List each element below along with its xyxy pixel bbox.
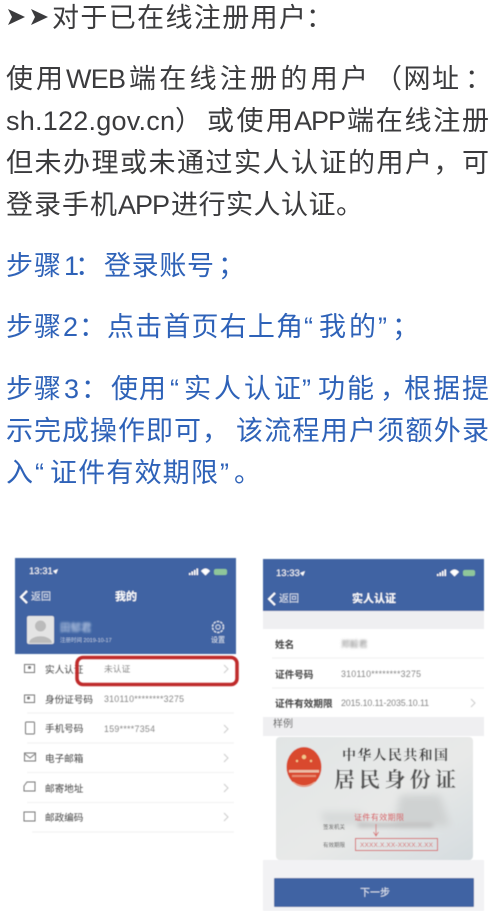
step 3: 3 <box>64 374 79 404</box>
step 3: 根据提 <box>404 374 489 404</box>
blue header: verification: 13:33 <box>276 568 300 579</box>
step 2 <box>6 312 419 342</box>
icon: settings gear <box>212 622 224 632</box>
step 3 <box>6 374 489 488</box>
intro paragraph: ） <box>175 106 202 136</box>
icon: avatar <box>27 616 54 644</box>
icon: status bar <box>437 570 475 576</box>
intro paragraph: 或使用 <box>207 106 293 136</box>
ID card sample: 证件有效期限 <box>354 812 404 822</box>
blue header: my profile: 返回 <box>31 591 51 603</box>
intro paragraph: 端在线注册 <box>347 106 489 136</box>
row: ID number <box>24 694 184 706</box>
row: real-name verification <box>24 663 228 676</box>
step 3: 功能 <box>318 374 374 404</box>
heading: registered online users: 对于已在线注册用户 <box>52 3 306 33</box>
step 3: 示完成操作即可 <box>6 416 201 446</box>
row: real-name verification: 未认证 <box>104 663 131 674</box>
step 1: 1 <box>64 251 79 281</box>
step 3: 入 <box>6 458 33 488</box>
intro paragraph: 登录手机 <box>6 190 117 220</box>
callout: red highlight box <box>77 658 237 684</box>
row: phone number: 159****7354 <box>104 724 155 734</box>
form rows: 2015.10.11-2035.10.11 <box>341 698 429 708</box>
row: email <box>24 753 228 765</box>
arrow <box>374 824 378 836</box>
ID card sample: 签发机关 <box>323 823 346 831</box>
step 3: ： <box>81 374 108 404</box>
intro paragraph: sh.122.gov.cn <box>6 106 175 136</box>
step 3: ” <box>220 458 229 488</box>
blue header: my profile: 我的 <box>115 589 137 603</box>
sample label band: 样例 <box>273 717 293 730</box>
step 1: ； <box>218 251 245 281</box>
intro paragraph: 端在线注册的用户 <box>129 64 368 94</box>
step 3: 该流程用户须额外录 <box>236 416 489 446</box>
step 3: 使用 <box>111 374 166 404</box>
step 3: 。 <box>234 458 261 488</box>
step 1: 登录账号 <box>104 251 214 281</box>
bottom band with next button <box>263 860 484 911</box>
step 1 <box>6 251 245 281</box>
form rows: 姓名 <box>275 639 294 651</box>
step 2: “ <box>304 312 313 342</box>
form rows: 证件号码 <box>275 669 314 681</box>
intro paragraph: 进行实人认证。 <box>171 190 363 220</box>
intro paragraph: 但未办理或未通过实人认证的用户，可 <box>6 148 489 178</box>
row: real-name verification: 实人认证 <box>45 664 84 676</box>
row: phone number: 手机号码 <box>45 723 84 735</box>
step 3: 实人认证 <box>184 374 301 404</box>
sample label band <box>263 717 484 736</box>
blue header: my profile: 设置 <box>211 635 225 644</box>
blue header: my profile: 田郁君 <box>60 621 92 634</box>
row: mailing address: 邮寄地址 <box>45 783 84 795</box>
row: email: 电子邮箱 <box>45 753 84 765</box>
blue header: verification: 实人认证 <box>352 591 396 605</box>
step 3: 证件有效期限 <box>50 458 218 488</box>
form rows: 郑毅君 <box>341 638 368 649</box>
blue header: my profile <box>15 558 236 654</box>
step 3: “ <box>35 458 44 488</box>
icon: double arrow <box>8 9 48 25</box>
form rows <box>272 638 484 710</box>
step 1: 步骤 <box>6 251 61 281</box>
right phone screenshot <box>263 559 484 911</box>
step 3: ， <box>202 416 229 446</box>
step 2: ； <box>392 312 419 342</box>
blurred issuing authority <box>358 823 433 827</box>
gray separator band <box>263 611 484 629</box>
blue header: my profile: 13:31 <box>29 566 53 577</box>
blue header: my profile: 注册时间 2019-10-17 <box>60 636 112 644</box>
intro paragraph: WEB <box>66 64 126 94</box>
profile rows <box>24 663 234 832</box>
step 2: 我的 <box>319 312 376 342</box>
intro paragraph: APP <box>118 190 170 220</box>
row: postal code: 邮政编码 <box>45 812 84 824</box>
bottom band with next button: 下一步 <box>360 887 390 899</box>
icon: back chevron <box>269 593 275 605</box>
icon: national emblem <box>286 747 322 787</box>
row: ID number: 身份证号码 <box>45 694 93 706</box>
step 2: 2 <box>63 312 78 342</box>
step 3: “ <box>170 374 179 404</box>
step 3: 步骤 <box>6 374 61 404</box>
blue header: verification: 返回 <box>279 593 299 605</box>
form rows: 310110********3275 <box>341 669 421 679</box>
blue header: verification <box>263 559 484 611</box>
step 2: ： <box>79 312 106 342</box>
icon: status bar <box>189 568 227 576</box>
ID card sample: 居民身份证 <box>334 768 456 792</box>
row: ID number: 310110********3275 <box>104 694 184 704</box>
step 2: 点击首页右上角 <box>107 312 303 342</box>
step 1: ： <box>75 251 102 281</box>
heading: registered online users: ： <box>306 3 333 33</box>
intro paragraph: APP <box>294 106 346 136</box>
icon: back chevron <box>21 591 27 603</box>
ID card sample: 中华人民共和国 <box>342 747 448 764</box>
intro paragraph <box>6 64 492 220</box>
validity period box <box>356 838 438 850</box>
form rows: 证件有效期限 <box>275 698 333 710</box>
step 3: ， <box>380 374 407 404</box>
step 2: 步骤 <box>6 312 61 342</box>
left phone screenshot <box>15 558 237 832</box>
card landscape shading <box>320 795 450 826</box>
intro paragraph: （网址 <box>375 64 459 94</box>
intro paragraph: ： <box>465 64 492 94</box>
row: phone number <box>26 722 228 735</box>
row: postal code <box>24 812 228 824</box>
step 3: ” <box>302 374 311 404</box>
ID card sample <box>276 737 473 860</box>
ID card sample: 有效期限 <box>323 841 346 849</box>
row: mailing address <box>24 782 228 795</box>
validity period box: XXXX.X.XX-XXXX.X.XX <box>360 842 434 849</box>
intro paragraph: 使用 <box>6 64 63 94</box>
step 2: ” <box>378 312 387 342</box>
